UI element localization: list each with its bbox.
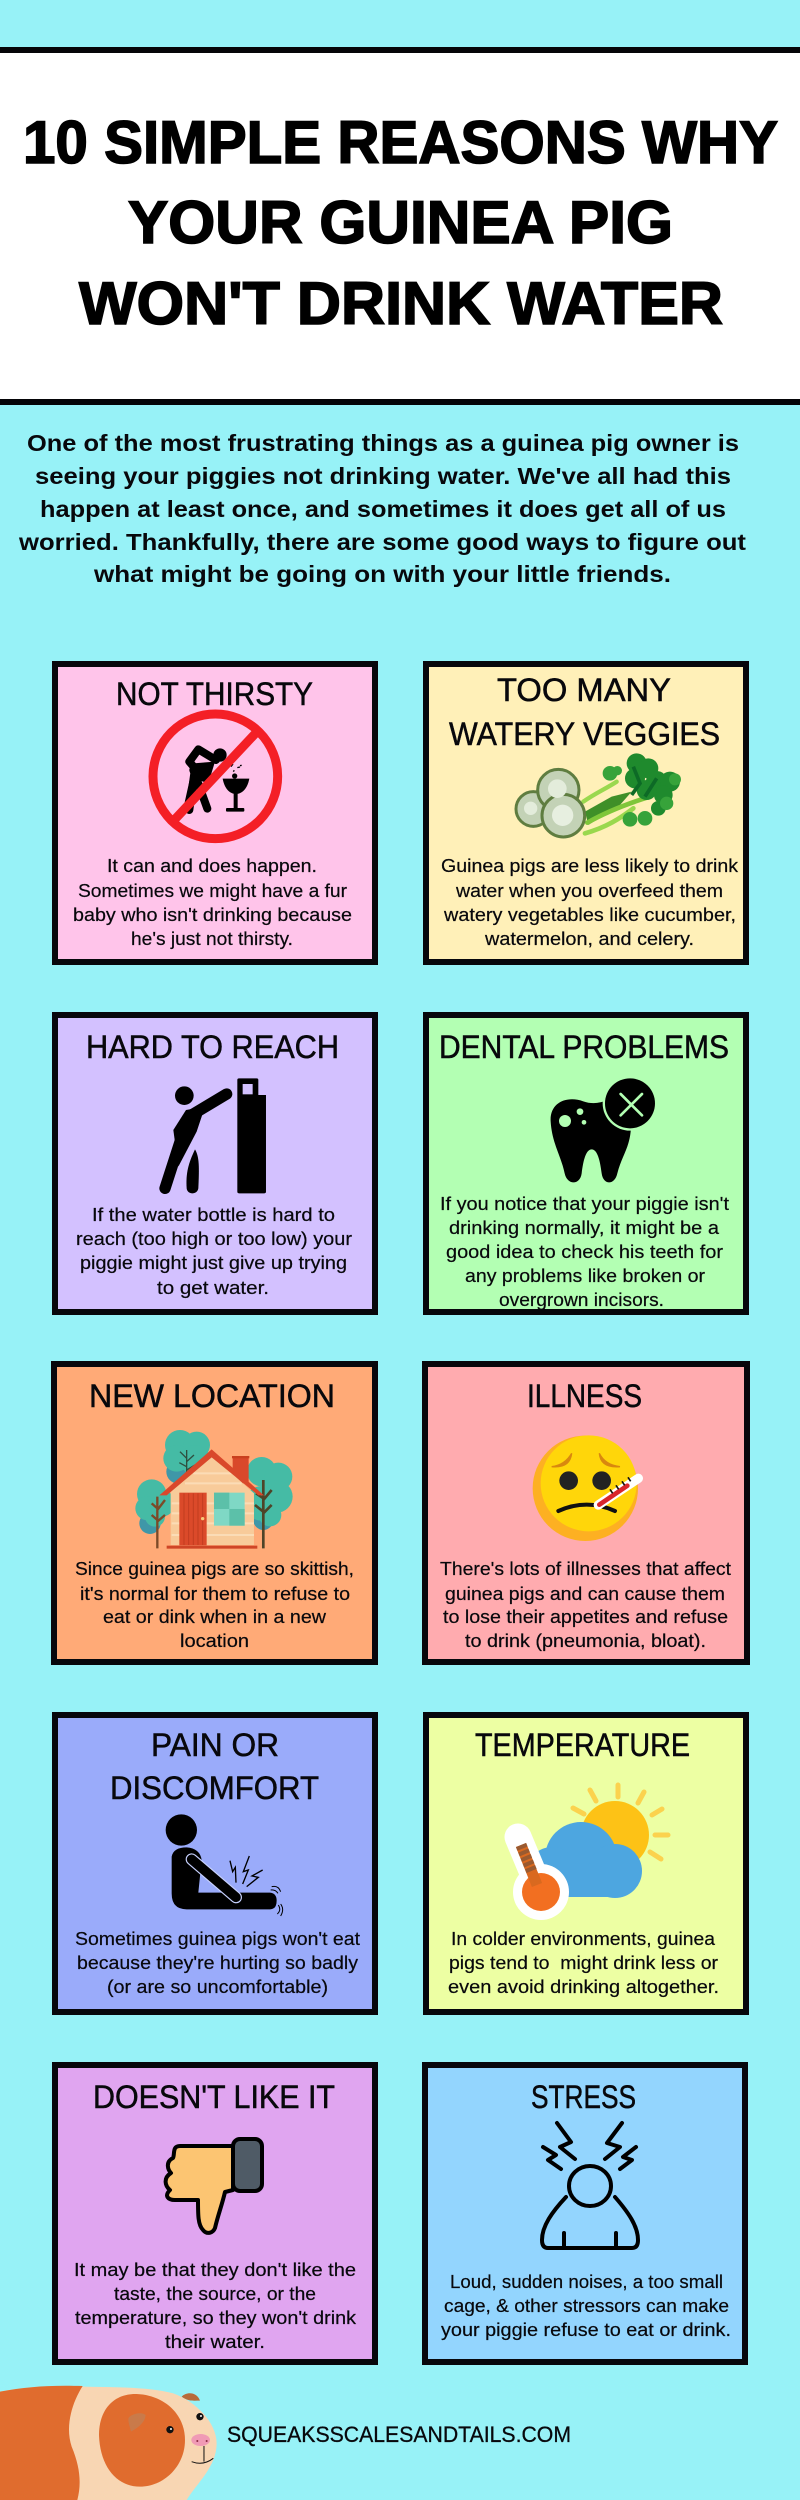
title: WON'T DRINK WATER	[79, 270, 723, 337]
icon: thumbs down	[166, 2139, 262, 2233]
heading: dental problems: DENTAL PROBLEMS	[439, 1029, 729, 1065]
body text: (or are so uncomfortable)	[107, 1977, 328, 1997]
body text	[75, 1559, 354, 1651]
heading: pain or discomfort: DISCOMFORT	[110, 1770, 319, 1806]
panel: temperature	[426, 1715, 746, 2012]
icon: person in pain	[166, 1814, 283, 1916]
body text: water when you overfeed them	[455, 881, 723, 901]
intro paragraph: seeing your piggies not drinking water. We've all had this	[35, 463, 731, 489]
icon: thermometer, cloud and sun	[513, 1785, 668, 1920]
heading: doesn't like it: DOESN'T LIKE IT	[93, 2079, 335, 2115]
intro paragraph: worried. Thankfully, there are some good ways to figure out	[18, 529, 746, 555]
icon: cucumber and celery	[516, 753, 681, 837]
body text: Loud, sudden noises, a too small	[450, 2272, 723, 2292]
body text: taste, the source, or the	[114, 2284, 316, 2304]
panel: doesn't like it	[55, 2065, 375, 2362]
heading: new location: NEW LOCATION	[89, 1378, 335, 1414]
intro paragraph: what might be going on with your little friends.	[93, 561, 671, 587]
body text: even avoid drinking altogether.	[448, 1977, 719, 1997]
panel: illness	[425, 1364, 747, 1662]
body text: overgrown incisors.	[499, 1290, 664, 1310]
panel: new location	[54, 1364, 375, 1662]
body text: baby who isn't drinking because	[73, 905, 352, 925]
body text: eat or dink when in a new	[103, 1607, 327, 1627]
body text: any problems like broken or	[465, 1266, 705, 1286]
body text: Since guinea pigs are so skittish,	[75, 1559, 354, 1579]
body text	[76, 1205, 352, 1298]
panel: pain or discomfort	[55, 1715, 375, 2012]
title: 10 SIMPLE REASONS WHY	[23, 109, 778, 176]
body text: to drink (pneumonia, bloat).	[465, 1631, 706, 1651]
heading: temperature: TEMPERATURE	[475, 1727, 690, 1763]
body text: It may be that they don't like the	[74, 2260, 356, 2280]
body text: In colder environments, guinea	[451, 1929, 716, 1949]
body text: he's just not thirsty.	[131, 929, 293, 949]
intro paragraph: One of the most frustrating things as a guinea pig owner is	[27, 430, 739, 456]
icon: guinea pig	[0, 2386, 217, 2500]
body text: reach (too high or too low) your	[76, 1229, 352, 1249]
body text: piggie might just give up trying	[80, 1253, 347, 1273]
body text: pigs tend to might drink less or	[449, 1953, 718, 1973]
body text	[441, 2272, 731, 2340]
heading: stress: STRESS	[531, 2079, 636, 2115]
body text: to lose their appetites and refuse	[443, 1607, 728, 1627]
heading: too many watery veggies: TOO MANY	[497, 672, 671, 708]
icon: no drinking sign	[153, 714, 278, 839]
body text	[441, 856, 739, 949]
body text: drinking normally, it might be a	[449, 1218, 720, 1238]
icon: person reaching for bottle	[165, 1078, 266, 1193]
panel: too many watery veggies	[426, 664, 746, 962]
heading: pain or discomfort: PAIN OR	[151, 1727, 279, 1763]
title	[23, 109, 778, 337]
body text: watermelon, and celery.	[484, 929, 694, 949]
body text	[73, 856, 352, 949]
title: YOUR GUINEA PIG	[128, 189, 673, 256]
panel: dental problems	[426, 1015, 746, 1312]
body text: If you notice that your piggie isn't	[440, 1194, 729, 1214]
heading: hard to reach: HARD TO REACH	[86, 1029, 339, 1065]
panel: not thirsty	[55, 664, 375, 962]
body text: Sometimes we might have a fur	[78, 881, 347, 901]
body text: good idea to check his teeth for	[446, 1242, 723, 1262]
intro paragraph: happen at least once, and sometimes it does get all of us	[40, 496, 726, 522]
heading: not thirsty: NOT THIRSTY	[116, 676, 313, 712]
icon: sick face with thermometer	[533, 1435, 638, 1541]
body text	[448, 1929, 719, 1997]
body text: guinea pigs and can cause them	[445, 1584, 725, 1604]
body text: location	[180, 1631, 249, 1651]
body text: their water.	[165, 2332, 265, 2352]
heading: illness: ILLNESS	[527, 1378, 642, 1414]
body text	[440, 1194, 729, 1310]
panel: stress	[425, 2065, 745, 2362]
body text	[74, 2260, 357, 2352]
body text: your piggie refuse to eat or drink.	[441, 2320, 731, 2340]
heading: pain or discomfort	[110, 1727, 319, 1806]
body text: There's lots of illnesses that affect	[440, 1559, 731, 1579]
body text: watery vegetables like cucumber,	[443, 905, 736, 925]
body text: to get water.	[157, 1278, 269, 1298]
body text: because they're hurting so badly	[77, 1953, 358, 1973]
body text: It can and does happen.	[107, 856, 317, 876]
body text: cage, & other stressors can make	[444, 2296, 729, 2316]
body text: Sometimes guinea pigs won't eat	[75, 1929, 360, 1949]
intro paragraph	[18, 430, 746, 587]
panel: hard to reach	[55, 1015, 375, 1312]
body text: temperature, so they won't drink	[75, 2308, 357, 2328]
body text: If the water bottle is hard to	[92, 1205, 335, 1225]
body text	[440, 1559, 731, 1651]
body text: Guinea pigs are less likely to drink	[441, 856, 739, 876]
body text	[75, 1929, 360, 1997]
title banner	[0, 50, 800, 402]
icon: damaged tooth	[551, 1076, 657, 1182]
heading: too many watery veggies	[449, 672, 720, 752]
footer website: SQUEAKSSCALESANDTAILS.COM	[227, 2422, 571, 2447]
icon: house with trees	[135, 1430, 293, 1549]
body text: it's normal for them to refuse to	[80, 1584, 350, 1604]
heading: too many watery veggies: WATERY VEGGIES	[449, 716, 720, 752]
icon: stressed person	[542, 2123, 638, 2248]
